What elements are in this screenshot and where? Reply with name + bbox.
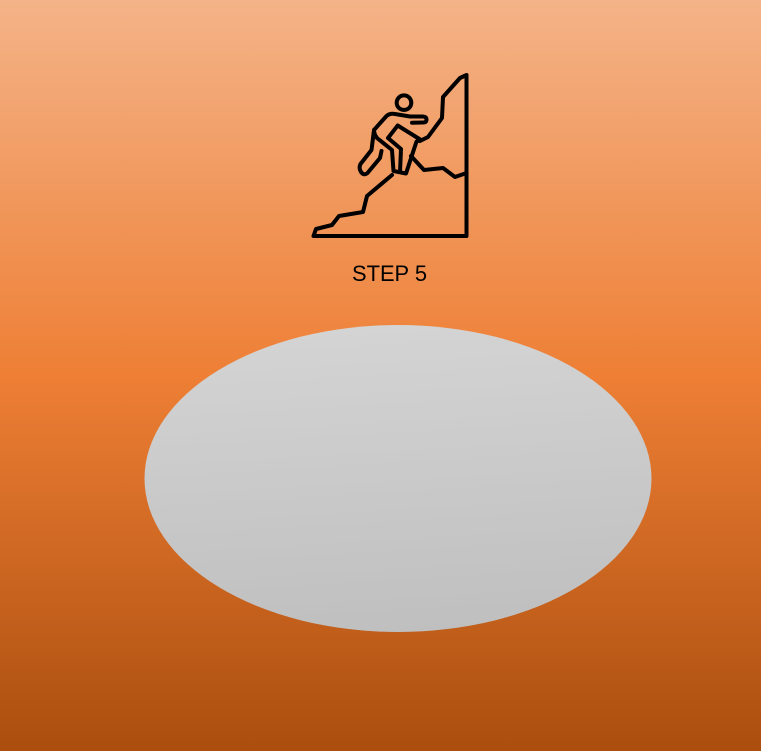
step label: STEP 5	[352, 261, 427, 286]
icon: rock ledge	[411, 156, 466, 177]
icon: climber head	[397, 95, 411, 110]
icon: climber on a cliff	[314, 75, 466, 236]
icon: climber torso and arms	[374, 114, 426, 174]
icon: cliff outline	[314, 75, 466, 236]
grey oval	[144, 325, 652, 632]
icon: climber trailing leg	[360, 130, 382, 174]
